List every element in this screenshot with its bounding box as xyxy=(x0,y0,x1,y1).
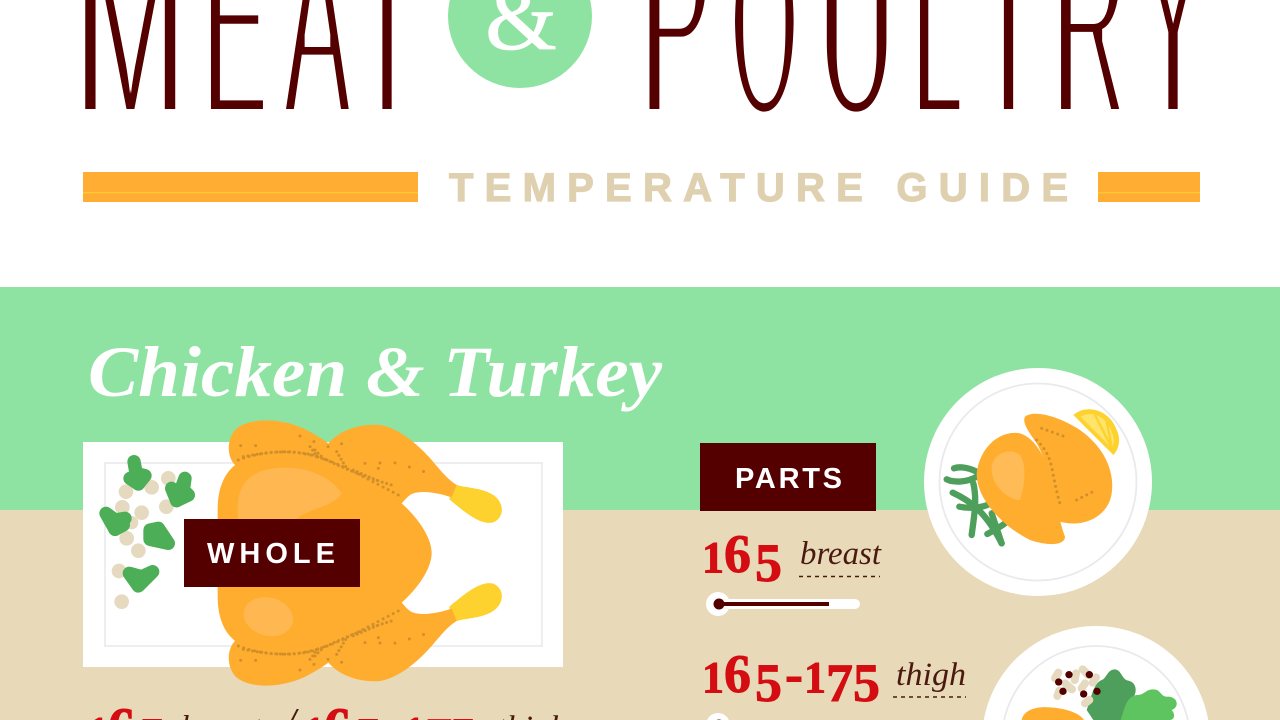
left orange rule xyxy=(83,172,418,202)
whole bird temperature text xyxy=(87,697,567,720)
title: MEAT xyxy=(74,0,418,173)
panel: whole bird platter xyxy=(83,420,567,720)
right orange rule xyxy=(1098,172,1200,202)
icon: roast chicken xyxy=(218,420,502,686)
tan band background xyxy=(0,510,1280,720)
label: PARTS xyxy=(700,443,876,511)
chicken xyxy=(1022,707,1084,720)
ampersand badge xyxy=(448,0,592,88)
chicken pieces xyxy=(1024,414,1112,524)
platter xyxy=(83,442,563,667)
number: 165-175: 5 xyxy=(755,653,782,713)
subtitle: TEMPERATURE GUIDE xyxy=(449,166,1068,210)
icon: plate with chicken breast xyxy=(924,368,1152,596)
lemon wedge xyxy=(1073,409,1119,455)
label: WHOLE xyxy=(184,519,360,587)
thermometer: breast xyxy=(706,592,860,616)
green band background xyxy=(0,287,1280,511)
number: 165: 6 xyxy=(724,524,751,584)
dark lettuce xyxy=(1087,669,1136,720)
number: 165: 1 xyxy=(702,533,724,582)
label: WHOLE: WHOLE xyxy=(207,538,335,570)
beans xyxy=(1055,669,1096,703)
number: 165-175: 1 xyxy=(804,653,826,702)
light lettuce xyxy=(1121,689,1177,720)
number: 165-175: 7 xyxy=(826,653,853,713)
icon: plate with chicken thigh and salad xyxy=(982,626,1210,720)
thermometer: thigh xyxy=(706,713,860,720)
thigh temperature xyxy=(702,644,966,720)
number: 165-175: 5 xyxy=(853,653,880,713)
breast temperature xyxy=(702,524,882,616)
title: POULTRY xyxy=(641,0,1206,173)
icon: herbs and beans garnish xyxy=(106,462,188,609)
number: 165: 5 xyxy=(755,533,782,593)
label: PARTS: PARTS xyxy=(735,463,842,495)
heading: Chicken & Turkey: Chicken & Turkey xyxy=(88,332,663,412)
label: breast: breast xyxy=(800,536,882,572)
number: 165-175: 6 xyxy=(724,644,751,704)
berries xyxy=(1055,671,1101,698)
label: thigh: thigh xyxy=(896,657,966,693)
rosemary xyxy=(947,467,1005,543)
number: 165-175: - xyxy=(785,644,803,704)
number: 165-175: 1 xyxy=(702,653,724,702)
